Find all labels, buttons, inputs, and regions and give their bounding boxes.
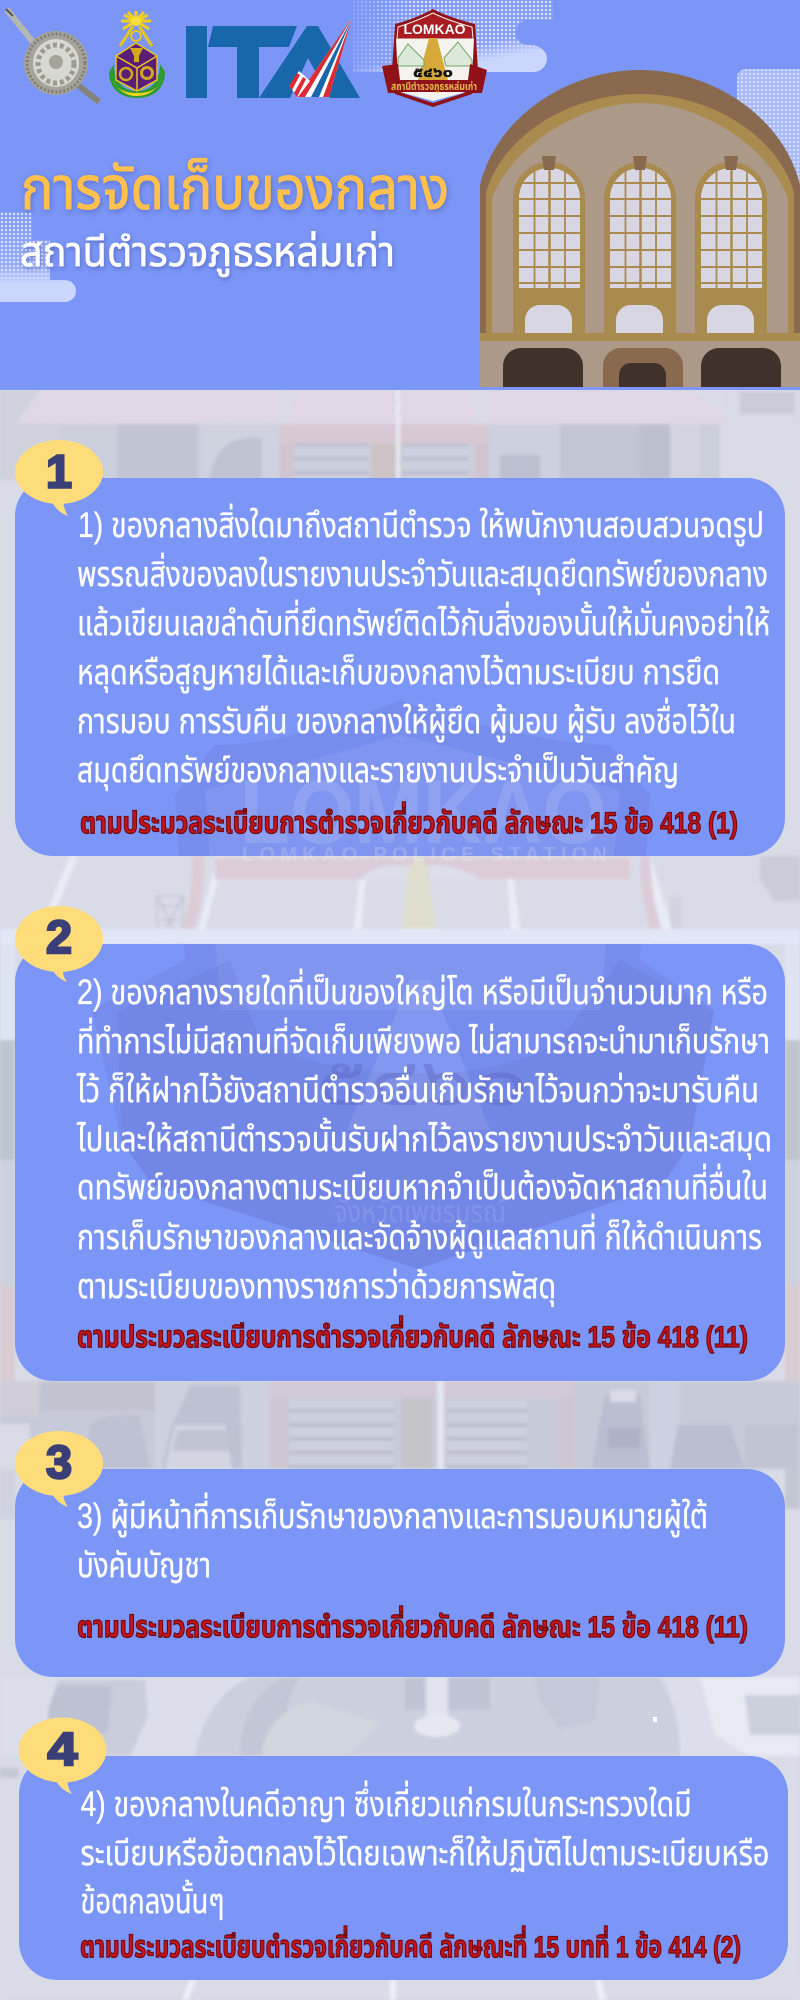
badge 2: [15, 906, 103, 982]
icon: silver emblem with handle: [6, 9, 99, 102]
icon: Lomkao police badge: สถานีตำรวจภูธรหล่มเก่า: [391, 80, 477, 93]
card 4: [18, 1718, 770, 1964]
watermark: station crest: [92, 700, 714, 1269]
badge 2: 2: [46, 911, 72, 963]
badge 4: [18, 1718, 106, 1794]
badge 1: [15, 440, 103, 516]
text: item 1: [77, 503, 770, 791]
text: item 3: บังคับบัญชา: [77, 1546, 211, 1585]
cloud: top: [353, 0, 553, 72]
text: item 3: [77, 1492, 708, 1585]
title: การจัดเก็บของกลาง: [21, 155, 449, 222]
watermark: station crest: LOMKAO POLICE STATION: [242, 844, 607, 866]
illustration: arched building: [480, 70, 800, 387]
cloud: right: [737, 69, 800, 190]
watermark: station crest: ๕๔๖๐: [315, 1042, 529, 1120]
card 2: [15, 906, 772, 1354]
badge 4: 4: [48, 1723, 78, 1775]
subtitle: สถานีตำรวจภูธรหล่มเก่า: [20, 229, 395, 277]
cloud: left: [0, 212, 76, 302]
icon: royal police emblem: [109, 11, 165, 98]
card 1: [15, 440, 770, 840]
icon: Lomkao police badge: ๕๔๖๐: [413, 64, 453, 80]
panel: card backgrounds: [15, 478, 788, 1980]
watermark: station crest: LOMKAO: [240, 763, 606, 863]
badge 3: 3: [46, 1436, 72, 1488]
text: item 4: [80, 1780, 770, 1921]
photo highlight dot: [653, 1717, 657, 1722]
panel: header: [0, 0, 800, 390]
icon: Lomkao police badge: [382, 9, 487, 107]
text: item 2: ตามระเบียบของทางราชการว่าด้วยการพัสดุ: [77, 1267, 556, 1307]
badge 3: [15, 1431, 103, 1507]
text: item 2: [76, 968, 772, 1307]
text: item 1: สมุดยึดทรัพย์ของกลางและรายงานประจำเป็นวันสำคัญ: [77, 751, 679, 791]
icon: ITA logo: [186, 18, 360, 98]
watermark: station crest: จังหวัดเพชรบูรณ์: [334, 1196, 506, 1230]
badge 1: 1: [46, 446, 72, 498]
card 3: [15, 1431, 748, 1644]
text: item 4: ข้อตกลงนั้นๆ: [80, 1879, 224, 1921]
icon: Lomkao police badge: LOMKAO: [404, 22, 466, 37]
